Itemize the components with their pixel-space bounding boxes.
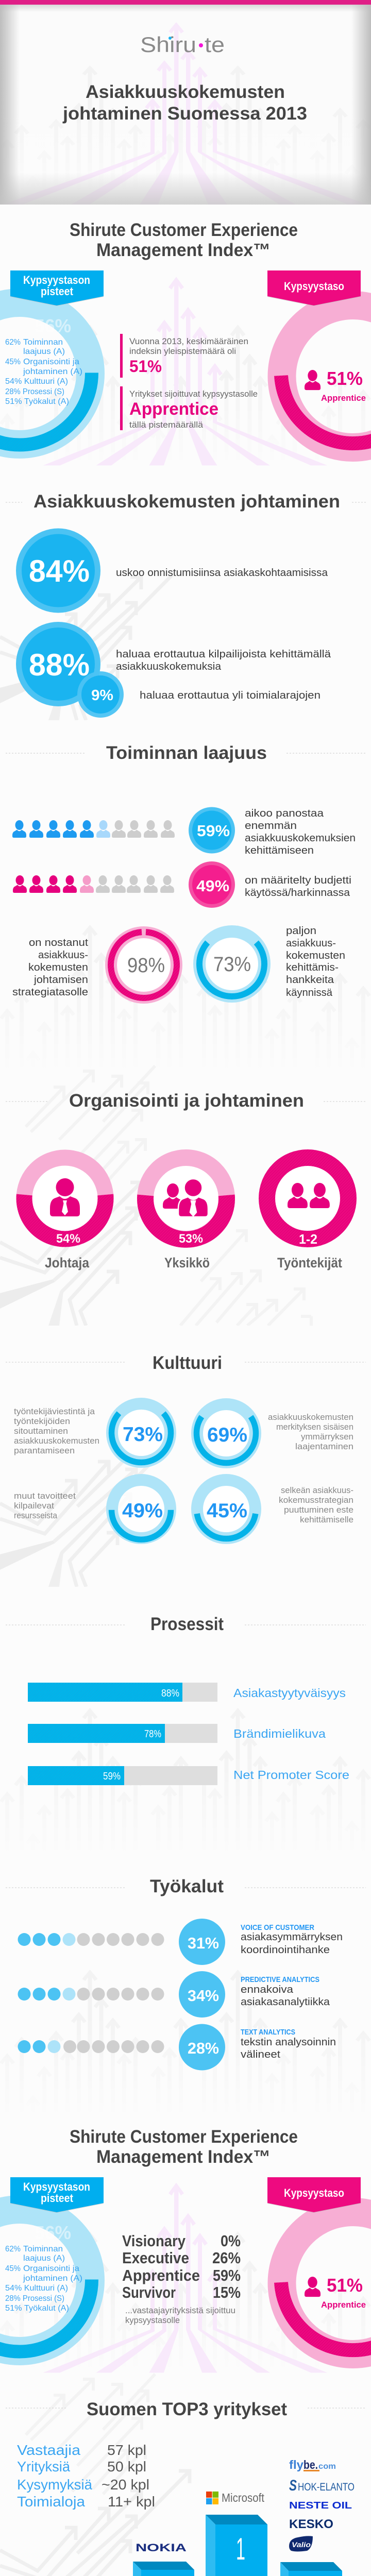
text 49%: muut tavoitteet: [14, 1491, 76, 1501]
bar 88%: [28, 1683, 217, 1702]
text 49%: kilpailevat: [14, 1501, 54, 1511]
heading: top 3: Suomen TOP3 yritykset: [87, 2399, 287, 2419]
text 28%: välineet: [241, 2049, 280, 2060]
stat 84%: 84%: [29, 554, 90, 588]
gray vertical arrows: index section: [0, 325, 371, 637]
text 98%: strategiatasolle: [12, 987, 88, 998]
text 98%: kokemusten: [28, 962, 88, 973]
stat 28%: 28%: [188, 2039, 219, 2057]
stat 31%: 31%: [188, 1934, 219, 1952]
gray vertical arrows: processes section: [0, 1708, 371, 2003]
stat 49%: 49%: [196, 877, 229, 895]
text 84%: uskoo onnistumisiinsa asiakaskohtaamisissa: [116, 567, 328, 579]
gray vertical arrows: tools section: [18, 1919, 347, 2070]
text 98%: johtamisen: [33, 974, 88, 986]
text 73%: kehittämis-: [286, 962, 339, 973]
level value: [321, 2275, 366, 2310]
label 59%: Net Promoter Score: [233, 1768, 349, 1782]
heading: scope: Toiminnan laajuus: [106, 743, 267, 763]
score list: Organisointi ja: [23, 2264, 79, 2273]
hero panel: [0, 5, 371, 205]
stat 59%: [189, 807, 235, 853]
logo: Neste Oil: NESTE OIL: [289, 2500, 352, 2511]
heading: culture: Kulttuuri: [153, 1353, 222, 1373]
logo: HOK-Elanto: HOK-ELANTO: [298, 2481, 355, 2493]
panel: tools: [18, 1919, 343, 2070]
score list: 54% Kulttuuri (A): [5, 2284, 68, 2293]
logo: flybe: [289, 2458, 336, 2471]
ring: employees: [267, 1158, 348, 1247]
diagonal arrows: top 3 section: [0, 2373, 192, 2576]
text 59%: kehittämiseen: [245, 845, 314, 856]
text 73%: sitouttaminen: [14, 1426, 68, 1436]
stat 34%: 34%: [188, 1987, 219, 2005]
label: employees: Työntekijät: [277, 1255, 342, 1270]
score ring: 56%: [35, 315, 71, 336]
top bar: [0, 0, 371, 5]
title: Asiakkuuskokemusten: [86, 82, 285, 102]
score list: laajuus (A): [23, 2254, 65, 2263]
centre text: average: indeksin yleispistemäärä oli: [129, 346, 236, 356]
score list: 54% Kulttuuri (A): [5, 377, 68, 386]
survey facts: [17, 2442, 155, 2510]
heading: tools: Työkalut: [150, 1876, 224, 1896]
level distribution: Apprentice: [122, 2266, 200, 2284]
text 88%: asiakkuuskokemuksia: [116, 661, 222, 672]
level value: 51%: [327, 368, 363, 389]
panel: index scores: [0, 270, 371, 447]
ring: leader: 54%: [56, 1232, 80, 1246]
text 31%: koordinointihanke: [241, 1944, 330, 1956]
centre text: average: 51%: [129, 357, 162, 376]
score tag: [10, 270, 104, 306]
level value: Apprentice: [321, 393, 366, 403]
ring: employees: 1-2: [299, 1231, 317, 1247]
survey facts: ~20 kpl: [102, 2477, 149, 2493]
text 98%: asiakkuus-: [38, 950, 88, 961]
logo: HOK-Elanto: [289, 2477, 355, 2494]
logo: flybe: be.: [303, 2458, 318, 2471]
text 73%: asiakkuuskokemusten: [14, 1436, 99, 1446]
logo: te: [205, 32, 225, 57]
text 98%: on nostanut: [29, 937, 88, 948]
text 98%: [12, 937, 88, 998]
diagonal arrows: culture section: [0, 1460, 149, 1587]
ring 49%: 49%: [122, 1500, 163, 1522]
level tag: [267, 2177, 361, 2213]
level distribution: 26%: [212, 2249, 241, 2267]
score list: 62%: [5, 338, 21, 347]
podium 1: 1: [236, 2532, 245, 2566]
logo: Shiru: [140, 32, 196, 57]
score list: 28% Prosessi (S): [5, 387, 64, 396]
heading: index: [70, 220, 298, 260]
score list: 51% Työkalut (A): [5, 2304, 69, 2313]
bar 59%: [28, 1766, 217, 1785]
stat 59%: 59%: [197, 822, 230, 840]
score tag: Kypsyystason: [23, 274, 90, 286]
text 59%: [245, 808, 356, 856]
score list: Toiminnan: [23, 338, 63, 347]
centre text: average: [120, 334, 248, 378]
survey facts: Yrityksiä: [17, 2459, 70, 2475]
text 73%: työntekijäviestintä ja: [14, 1406, 95, 1416]
people row: 59%: [12, 820, 175, 838]
text 59%: enemmän: [245, 820, 297, 832]
ring 69%: 69%: [207, 1424, 247, 1446]
score list: Toiminnan: [23, 2245, 63, 2253]
text 69%: ymmärryksen: [301, 1432, 353, 1442]
ring 98%: 98%: [127, 954, 165, 977]
text 28%: [241, 2028, 336, 2060]
text 73%: [286, 925, 345, 998]
ring 98%: [111, 932, 177, 998]
level distribution: Survivor: [122, 2283, 176, 2301]
level ring: [281, 305, 371, 447]
diagonal arrows: organisation section: [0, 1066, 311, 1326]
text 31%: asiakasymmärryksen: [241, 1931, 343, 1943]
score tag: pisteet: [41, 2192, 74, 2205]
text 9%: haluaa erottautua yli toimialarajojen: [140, 690, 321, 701]
text 49%: [14, 1491, 76, 1520]
level distribution: kypsyystasolle: [125, 2315, 180, 2325]
level distribution: ...vastaajayrityksistä sijoittuu: [125, 2306, 235, 2315]
level tag: Kypsyystaso: [284, 280, 344, 293]
level value: Apprentice: [321, 2300, 366, 2310]
centre text: level: [120, 386, 258, 430]
text 49%: resursseista: [14, 1511, 57, 1520]
text 45%: puuttuminen este: [284, 1505, 353, 1515]
stat 9%: 9%: [91, 687, 113, 704]
ring 73%: [111, 1403, 171, 1463]
bar 59%: 59%: [103, 1771, 121, 1782]
panel: organisation: [24, 1158, 348, 1270]
level distribution: 15%: [213, 2283, 241, 2301]
text 59%: asiakkuuskokemuksien: [245, 833, 356, 844]
text 73%: työntekijöiden: [14, 1416, 70, 1426]
label: leader: Johtaja: [45, 1255, 90, 1270]
label 88%: Asiakastyytyväisyys: [233, 1686, 346, 1700]
text 45%: kehittämiselle: [300, 1515, 353, 1524]
score list: 62%: [5, 2245, 21, 2253]
ring 73%: 73%: [213, 953, 251, 976]
survey facts: Vastaajia: [17, 2442, 80, 2458]
level distribution: Visionary: [122, 2232, 186, 2250]
gray vertical arrows: scope section: [0, 925, 371, 1220]
logo: Valio: [289, 2536, 313, 2551]
heading: index: Management Index™: [96, 240, 271, 260]
text 45%: kokemusstrategian: [279, 1495, 353, 1505]
panel: process bars: [28, 1683, 349, 1785]
score list: laajuus (A): [23, 347, 65, 356]
text 69%: merkityksen sisäisen: [276, 1422, 353, 1432]
level value: [321, 368, 366, 403]
text 49%: käytössä/harkinnassa: [245, 887, 350, 899]
panel: scope: [12, 807, 356, 998]
icon: person: [305, 370, 321, 390]
ring 45%: 45%: [207, 1500, 247, 1522]
level distribution: Executive: [122, 2249, 189, 2267]
pink arrows: second index section: [43, 2183, 327, 2373]
title: johtaminen Suomessa 2013: [62, 104, 307, 124]
page background: upper: [0, 0, 371, 1597]
podium 3: [280, 2562, 342, 2576]
panel: culture: [14, 1403, 353, 1539]
bar 78%: [28, 1724, 217, 1743]
stat 88%: 88%: [29, 648, 90, 682]
stat 31%: [179, 1919, 225, 1965]
dots 28%: [18, 2040, 164, 2053]
ring 73%: [199, 931, 264, 996]
text 34%: PREDICTIVE ANALYTICS: [241, 1975, 319, 1984]
centre text: average: Vuonna 2013, keskimääräinen: [129, 336, 248, 346]
text 49%: on määritelty budjetti: [245, 875, 351, 886]
survey facts: 57 kpl: [107, 2442, 146, 2458]
text 34%: ennakoiva: [241, 1984, 294, 1995]
background arrow patterns: lower: [0, 1708, 371, 2576]
level ring: [281, 2212, 371, 2354]
text 73%: paljon: [286, 925, 316, 937]
text 73%: parantamiseen: [14, 1446, 75, 1455]
text 45%: selkeän asiakkuus-: [281, 1485, 353, 1495]
text 88%: haluaa erottautua kilpailijoista kehittämällä: [116, 649, 331, 660]
label: unit: Yksikkö: [164, 1255, 210, 1270]
level tag: Kypsyystaso: [284, 2187, 344, 2199]
logo: flybe: fly: [289, 2458, 303, 2471]
logo: Nokia: NOKIA: [136, 2542, 187, 2554]
text 73%: hankkeita: [286, 974, 334, 986]
text 31%: [241, 1923, 343, 1956]
heading: index repeat: [70, 2127, 298, 2167]
heading: processes: Prosessit: [150, 1614, 224, 1634]
heading: organisation: Organisointi ja johtaminen: [69, 1091, 304, 1111]
heading: index repeat: Management Index™: [96, 2147, 271, 2167]
text 69%: [268, 1412, 353, 1451]
logo: Microsoft: Microsoft: [222, 2491, 265, 2504]
survey facts: Toimialoja: [17, 2494, 85, 2510]
survey facts: 11+ kpl: [108, 2494, 155, 2510]
stat 28%: [179, 2024, 225, 2070]
heading: index repeat: Shirute Customer Experience: [70, 2127, 298, 2147]
stat 9%: [77, 671, 124, 718]
stat 49%: [189, 861, 235, 908]
logo: [140, 32, 225, 57]
dots 31%: [18, 1933, 164, 1946]
score tag: [10, 2177, 104, 2213]
text 73%: [14, 1406, 99, 1455]
ring 69%: [196, 1404, 256, 1463]
panel: management: [16, 529, 331, 718]
ring 45%: [197, 1480, 256, 1539]
page background: lower: [0, 1597, 371, 2576]
title: [62, 82, 307, 124]
people row: 49%: [13, 875, 174, 893]
score list: Organisointi ja: [23, 358, 79, 366]
text 49%: [245, 875, 351, 899]
ring 49%: [111, 1480, 171, 1539]
centre text: level: Yritykset sijoittuvat kypsyystasolle: [129, 389, 258, 399]
panel: index scores repeat: [0, 2177, 371, 2354]
score list: 45%: [5, 358, 21, 366]
text 28%: TEXT ANALYTICS: [241, 2028, 295, 2037]
ring 73%: 73%: [123, 1423, 163, 1446]
label 78%: Brändimielikuva: [233, 1727, 326, 1740]
logo: HOK-Elanto: S: [289, 2477, 297, 2494]
score tag: pisteet: [41, 285, 74, 298]
podium 1: [206, 2515, 267, 2576]
text 59%: aikoo panostaa: [245, 808, 324, 819]
level tag: [267, 270, 361, 306]
logo: flybe: com: [318, 2462, 336, 2471]
background arrow patterns: upper: [0, 277, 371, 1587]
score list: [5, 338, 82, 406]
score tag: Kypsyystason: [23, 2180, 90, 2193]
score list: 51% Työkalut (A): [5, 397, 69, 406]
logo: Valio: Valio: [292, 2540, 311, 2549]
ring: unit: [145, 1158, 227, 1246]
logo: Microsoft: [206, 2491, 265, 2504]
text 45%: [279, 1485, 353, 1524]
score list: johtaminen (A): [23, 2274, 82, 2283]
score list: 28% Prosessi (S): [5, 2294, 64, 2303]
pink arrows: index section: [43, 277, 327, 466]
text 88%: [116, 649, 331, 672]
stat 34%: [179, 1971, 225, 2018]
level distribution: 59%: [213, 2266, 241, 2284]
text 73%: käynnissä: [286, 987, 333, 998]
panel: top 3: [17, 2442, 355, 2576]
text 31%: VOICE OF CUSTOMER: [241, 1923, 314, 1932]
text 34%: [241, 1975, 330, 2008]
score list: 45%: [5, 2264, 21, 2273]
score list: [5, 2245, 82, 2313]
podium 2: [133, 2562, 194, 2576]
text 28%: tekstin analysoinnin: [241, 2037, 336, 2048]
heading: management: Asiakkuuskokemusten johtaminen: [33, 492, 340, 512]
icon: person: [305, 2277, 321, 2297]
level value: 51%: [327, 2275, 363, 2296]
score ring: [0, 2209, 92, 2351]
level distribution: [122, 2232, 241, 2325]
ring: unit: 53%: [179, 1232, 203, 1246]
text 73%: kokemusten: [286, 950, 345, 961]
bar 88%: 88%: [161, 1688, 179, 1699]
stat 88%: [16, 622, 100, 706]
text 69%: laajentaminen: [295, 1442, 353, 1451]
centre text: level: tällä pistemäärällä: [129, 420, 204, 430]
logo: Kesko: KESKO: [289, 2517, 333, 2531]
score ring: [0, 303, 92, 445]
bar 78%: 78%: [144, 1728, 161, 1740]
survey facts: 50 kpl: [107, 2459, 146, 2475]
text 34%: asiakasanalytiikka: [241, 1996, 330, 2008]
text 69%: asiakkuuskokemusten: [268, 1412, 353, 1422]
ring: leader: [24, 1158, 106, 1246]
diagonal arrows: management section: [0, 575, 174, 720]
heading: index: Shirute Customer Experience: [70, 220, 298, 240]
score list: johtaminen (A): [23, 367, 82, 376]
survey facts: Kysymyksiä: [17, 2477, 92, 2493]
level distribution: 0%: [221, 2232, 241, 2250]
score ring: 56%: [35, 2222, 71, 2243]
centre text: level: Apprentice: [129, 399, 218, 419]
text 73%: asiakkuus-: [286, 938, 336, 949]
dots 34%: [18, 1988, 164, 2001]
gray vertical arrows: second index section: [0, 2231, 371, 2544]
stat 84%: [16, 529, 100, 613]
